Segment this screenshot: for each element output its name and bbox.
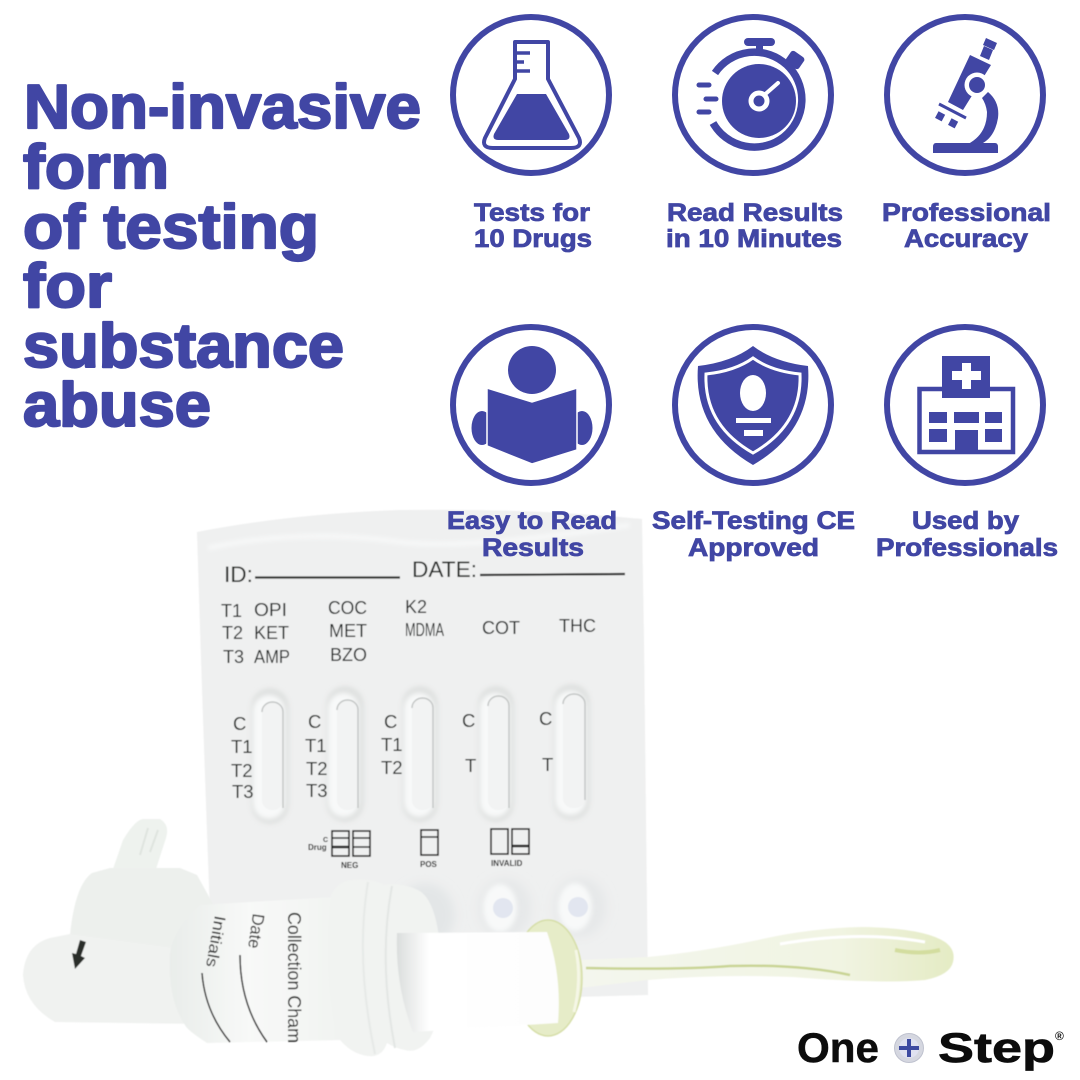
cap cylinder	[23, 934, 200, 1024]
window line labels: C	[308, 711, 321, 732]
logo: One Step	[797, 1024, 1064, 1071]
collection chamber tube with label	[170, 897, 345, 1043]
drug panel names: COC	[328, 597, 367, 618]
result key: NEG POS INVALID: C	[323, 837, 328, 844]
drug panel names: T2	[222, 622, 243, 643]
drug panel names: AMP	[254, 646, 290, 667]
window line labels: T2	[381, 757, 403, 778]
feature: used by professionals	[876, 327, 1058, 562]
window line labels: T2	[306, 758, 328, 779]
label: in 10 Minutes	[666, 225, 842, 253]
collection chamber tube with label: Initials	[202, 914, 228, 968]
window line labels	[231, 708, 553, 802]
icon: shield	[675, 327, 831, 483]
drug panel names: THC	[559, 615, 596, 636]
drug panel names: T1	[221, 600, 242, 621]
label: Self-Testing CE	[652, 507, 855, 535]
icon: arrow	[72, 940, 86, 969]
collection chamber tube with label: Date	[244, 912, 268, 950]
heading: for	[23, 252, 112, 321]
feature: tests for 10 drugs	[453, 17, 609, 253]
heading	[23, 73, 421, 440]
icon: flask	[453, 17, 609, 173]
result key: NEG POS INVALID: NEG	[341, 861, 358, 870]
feature: self-testing CE approved	[652, 327, 855, 562]
logo: One Step: One	[797, 1024, 879, 1071]
drug panel names: T3	[223, 646, 244, 667]
glass ring	[514, 920, 582, 1036]
drug panel names: K2	[405, 596, 427, 617]
label	[876, 507, 1058, 562]
label	[447, 507, 617, 562]
label: Results	[482, 534, 584, 562]
label	[666, 199, 843, 253]
drug panel names: MET	[329, 620, 367, 641]
window line labels: T3	[232, 781, 254, 802]
white plunger	[397, 932, 559, 1032]
feature: professional accuracy	[882, 17, 1051, 253]
logo: One Step: ®	[1055, 1029, 1064, 1043]
drug panel names	[221, 596, 596, 667]
icon: hospital	[887, 327, 1043, 483]
label: Used by	[912, 507, 1019, 535]
product: saliva collector	[23, 819, 954, 1056]
icon: stopwatch	[675, 17, 831, 173]
heading: Non-invasive	[24, 73, 421, 142]
heading: form	[23, 133, 169, 202]
window line labels: T3	[306, 780, 328, 801]
label	[474, 199, 592, 253]
window line labels: T	[465, 755, 476, 776]
icon: microscope	[887, 17, 1043, 173]
drug panel names: BZO	[330, 644, 367, 665]
collection chamber tube with label: Collection Cham	[284, 912, 305, 1043]
result key: NEG POS INVALID: POS	[420, 860, 438, 869]
label: Easy to Read	[447, 507, 617, 535]
paddle swab	[580, 927, 954, 988]
feature: read results in 10 minutes	[666, 17, 843, 253]
chamber rim	[328, 880, 441, 1056]
window line labels: C	[462, 710, 475, 731]
drug panel names: COT	[482, 617, 520, 638]
cassette body	[197, 510, 648, 997]
label: Approved	[688, 534, 819, 562]
drug panel names: OPI	[254, 599, 287, 620]
label: 10 Drugs	[474, 225, 592, 253]
window line labels: C	[233, 713, 246, 734]
label: Professional	[882, 199, 1051, 227]
ID and date fields: ID:	[224, 562, 253, 587]
result key: NEG POS INVALID: INVALID	[491, 859, 523, 868]
result key: NEG POS INVALID: Drug	[308, 843, 327, 852]
window line labels: C	[384, 711, 397, 732]
icon: plus	[894, 1034, 924, 1062]
icon: person reading	[453, 327, 609, 483]
label	[882, 199, 1051, 253]
window line labels: T2	[231, 760, 253, 781]
window line labels: T1	[231, 736, 253, 757]
finger tab	[113, 819, 167, 869]
window line labels: T	[542, 754, 553, 775]
heading: of testing	[23, 193, 319, 262]
label: Tests for	[474, 199, 590, 227]
sample wells	[395, 877, 607, 947]
ID and date fields	[224, 557, 625, 587]
window line labels: T1	[381, 734, 403, 755]
result key: NEG POS INVALID	[308, 829, 529, 870]
label: Professionals	[876, 534, 1058, 562]
cap dome	[70, 868, 250, 1000]
window line labels: C	[539, 708, 552, 729]
label	[652, 507, 855, 562]
feature: easy to read results	[447, 327, 617, 562]
drug panel names: KET	[254, 622, 289, 643]
window line labels: T1	[305, 735, 327, 756]
product: test cassette	[197, 510, 648, 997]
result windows	[251, 684, 590, 824]
drug panel names: MDMA	[405, 619, 444, 640]
label: Accuracy	[904, 225, 1028, 253]
heading: substance	[23, 312, 344, 381]
logo: One Step: Step	[938, 1024, 1055, 1071]
label: Read Results	[667, 199, 843, 227]
ID and date fields: DATE:	[412, 557, 477, 582]
heading: abuse	[23, 371, 211, 440]
